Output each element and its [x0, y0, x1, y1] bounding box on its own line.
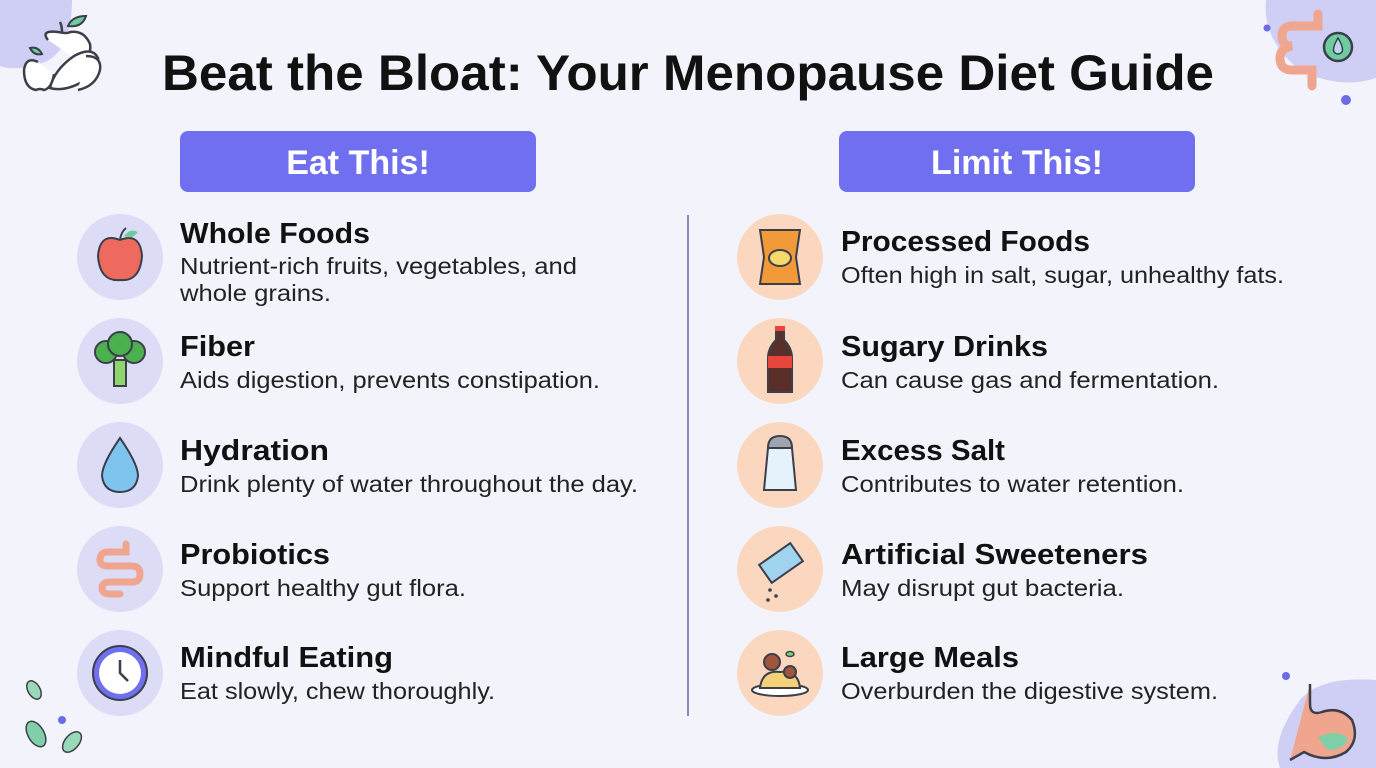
item: whole foods	[77, 214, 577, 306]
item: whole foods: Whole Foods	[180, 218, 370, 250]
item: artificial sweeteners	[737, 526, 1148, 612]
item: mindful eating: Mindful Eating	[180, 642, 393, 674]
item: processed foods: Often high in salt, sugar, unhealthy fats.	[841, 262, 1284, 288]
item: hydration: Drink plenty of water throughout the day.	[180, 471, 638, 497]
item: fiber	[77, 318, 600, 404]
decoration: top-right blob with intestine icon	[1264, 0, 1376, 105]
item: excess salt: Excess Salt	[841, 435, 1005, 467]
item: large meals: Large Meals	[841, 642, 1019, 674]
button: Eat This!	[180, 131, 536, 192]
item: mindful eating	[77, 630, 495, 716]
item: hydration	[77, 422, 638, 508]
item: large meals: Overburden the digestive system.	[841, 678, 1218, 704]
button: Eat This!: Eat This!	[286, 144, 430, 182]
item: fiber: Aids digestion, prevents constipation.	[180, 367, 600, 393]
panel: limit this list	[737, 214, 1284, 716]
item: probiotics	[77, 526, 466, 612]
item: mindful eating: Eat slowly, chew thoroughly.	[180, 678, 495, 704]
button: Limit This!	[839, 131, 1195, 192]
item: sugary drinks: Can cause gas and fermentation.	[841, 367, 1219, 393]
item: probiotics: Support healthy gut flora.	[180, 575, 466, 601]
item: large meals	[737, 630, 1218, 716]
item: whole foods: whole grains.	[179, 280, 331, 306]
decoration: top-left blob with fruit icon	[0, 0, 100, 90]
item: hydration: Hydration	[180, 435, 329, 467]
item: sugary drinks	[737, 318, 1219, 404]
item: artificial sweeteners: May disrupt gut bacteria.	[841, 575, 1124, 601]
item: artificial sweeteners: Artificial Sweeteners	[841, 539, 1148, 571]
item: processed foods	[737, 214, 1284, 300]
item: processed foods: Processed Foods	[841, 226, 1090, 258]
item: whole foods: Nutrient-rich fruits, vegetables, and	[180, 253, 577, 279]
decoration: bottom-left leaves	[22, 678, 85, 756]
item: excess salt: Contributes to water retention.	[841, 471, 1184, 497]
title: Beat the Bloat: Your Menopause Diet Guide	[162, 45, 1214, 101]
item: excess salt	[737, 422, 1184, 508]
panel: eat this list	[77, 214, 638, 716]
item: probiotics: Probiotics	[180, 539, 330, 571]
item: sugary drinks: Sugary Drinks	[841, 331, 1048, 363]
button: Limit This!: Limit This!	[931, 144, 1103, 182]
item: fiber: Fiber	[180, 331, 255, 363]
decoration: bottom-right blob with stomach icon	[1278, 672, 1376, 768]
